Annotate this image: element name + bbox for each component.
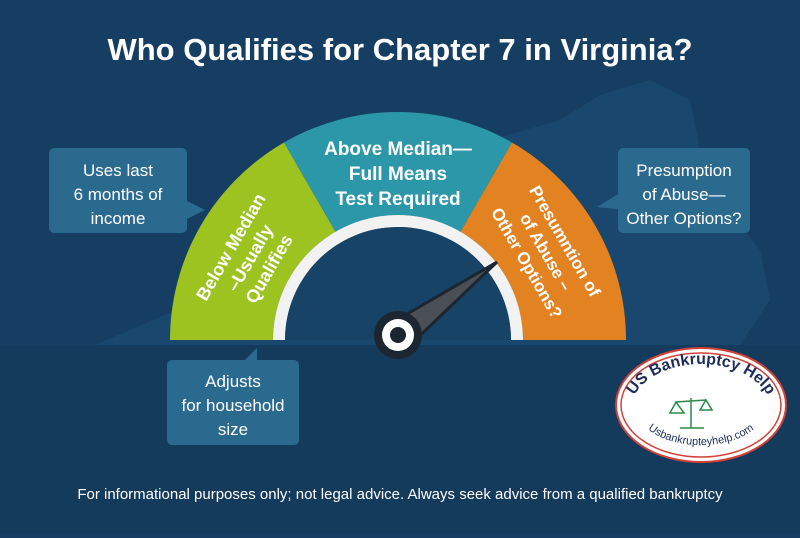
label: below median: Qualifies xyxy=(241,231,297,307)
callout: 6 months: Uses last xyxy=(83,161,153,180)
callout: 6 months: 6 months of xyxy=(74,185,163,204)
icon: scales xyxy=(670,398,712,428)
label: above median: Full Means xyxy=(349,164,447,185)
label: above median: Test Required xyxy=(335,189,461,210)
label: below median: –Usually xyxy=(223,221,277,295)
callout: household size: size xyxy=(218,420,248,439)
callout: presumption: of Abuse— xyxy=(642,185,726,204)
segment: above median xyxy=(284,112,512,232)
callout: presumption: Other Options? xyxy=(626,209,742,228)
label: presumption: of Abuse – xyxy=(516,210,575,294)
gauge xyxy=(170,112,626,359)
callout: presumption: Presumption xyxy=(636,161,732,180)
segment: below median xyxy=(170,142,336,340)
logo xyxy=(615,347,787,463)
label: below median: Below Median xyxy=(192,190,270,304)
label: presumption: Other Options? xyxy=(487,205,566,322)
hub xyxy=(374,311,422,359)
callout: household size: Adjusts xyxy=(205,372,261,391)
callout: presumption xyxy=(597,148,750,233)
footer disclaimer: For informational purposes only; not legal advice. Always seek advice from a qualified bankruptcy xyxy=(77,486,723,503)
callout: 6 months: income xyxy=(91,209,145,228)
needle xyxy=(388,262,497,347)
title: Who Qualifies for Chapter 7 in Virginia? xyxy=(107,32,693,67)
callout: household size xyxy=(167,348,299,445)
label: presumption: Presumntion of xyxy=(525,183,604,300)
label: above median: Above Median— xyxy=(324,139,472,160)
segment: presumption of abuse xyxy=(460,142,626,340)
callout: household size: for household xyxy=(181,396,285,415)
inner ring xyxy=(273,215,523,340)
callout: 6 months xyxy=(49,148,205,233)
logo: US Bankruptcy Help xyxy=(626,354,774,394)
logo: Usbankrupteyhelp.com xyxy=(649,424,754,448)
map silhouette xyxy=(95,80,770,345)
